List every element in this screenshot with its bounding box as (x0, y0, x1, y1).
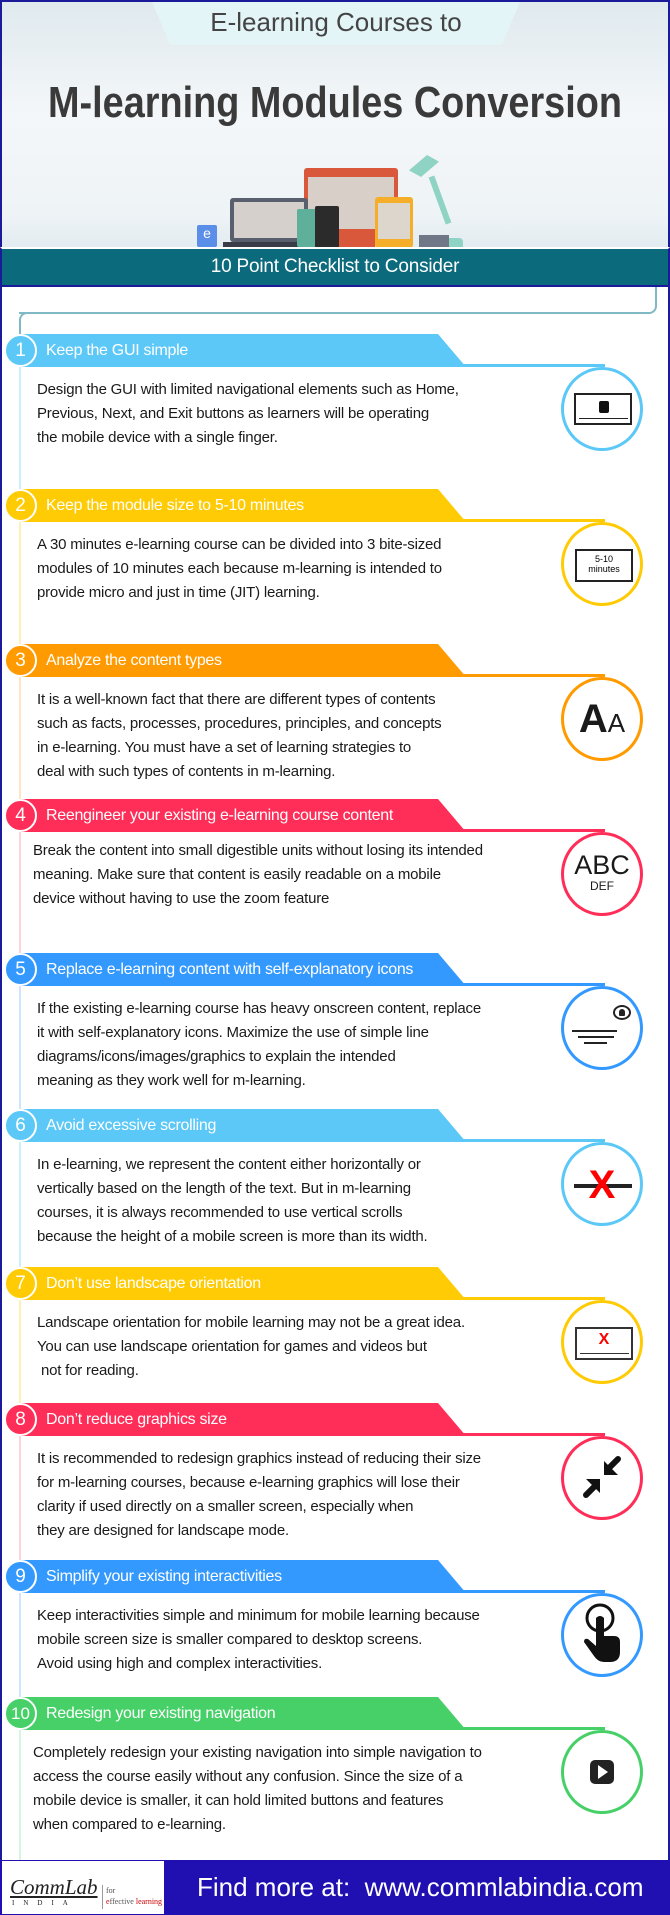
subtitle bar: 10 Point Checklist to Consider (211, 256, 459, 277)
text 9: Keep interactivities simple and minimum for mobile learning because (37, 1607, 480, 1624)
text 10 (33, 1744, 482, 1833)
heading 8: Don’t reduce graphics size (46, 1411, 227, 1428)
item 3: 3 (15, 650, 26, 671)
text 5: meaning as they work well for m-learning. (37, 1072, 306, 1089)
heading 7: Don’t use landscape orientation (46, 1275, 261, 1292)
item 1: 1 (15, 340, 26, 361)
item 10: 10 (11, 1704, 30, 1723)
text 1: Previous, Next, and Exit buttons as learners will be operating (37, 405, 429, 422)
text 1: the mobile device with a single finger. (37, 429, 278, 446)
hero illustration: devices (197, 155, 463, 247)
icon 9: touch hand (561, 1593, 643, 1677)
text 2: A 30 minutes e-learning course can be divided into 3 bite-sized (37, 536, 441, 553)
text 8: they are designed for landscape mode. (37, 1522, 289, 1539)
text 2 (37, 536, 442, 601)
item 3 (6, 644, 643, 799)
text 8: It is recommended to redesign graphics instead of reducing their size (37, 1450, 481, 1467)
item 6: 6 (15, 1115, 26, 1136)
text 8 (37, 1450, 481, 1539)
text 9 (37, 1607, 480, 1672)
heading 9: Simplify your existing interactivities (46, 1568, 282, 1585)
logo: effective learning (106, 1897, 162, 1906)
text 1: Design the GUI with limited navigational elements such as Home, (37, 381, 459, 398)
icon 4: ABC DEF (561, 832, 643, 916)
icon 3: AA (561, 677, 643, 761)
text 8: clarity if used directly on a smaller screen, especially when (37, 1498, 413, 1515)
heading 5: Replace e-learning content with self-explanatory icons (46, 961, 413, 978)
text 3: such as facts, processes, procedures, principles, and concepts (37, 715, 441, 732)
icon 6: line with red X (561, 1142, 643, 1226)
item 1 (6, 334, 643, 489)
icon 4: ABC DEF: ABC (574, 850, 630, 880)
text 2: provide micro and just in time (JIT) learning. (37, 584, 320, 601)
text 9: Avoid using high and complex interactivities. (37, 1655, 322, 1672)
item 7 (6, 1267, 643, 1403)
item 4 (6, 799, 643, 953)
item 5: 5 (15, 959, 26, 980)
icon 2 (561, 522, 643, 606)
mug (197, 225, 217, 247)
text 2: modules of 10 minutes each because m-learning is intended to (37, 560, 442, 577)
item 2 (6, 489, 643, 644)
text 6: courses, it is always recommended to use vertical scrolls (37, 1204, 402, 1221)
item 9: 9 (15, 1566, 26, 1587)
monitor (304, 168, 398, 236)
text 7: You can use landscape orientation for games and videos but (37, 1338, 427, 1355)
text 5 (37, 1000, 481, 1089)
heading 3: Analyze the content types (46, 652, 222, 669)
footer (0, 1860, 670, 1915)
top ribbon subtitle: E-learning Courses to (210, 7, 462, 37)
connector line (19, 287, 657, 314)
text 3 (37, 691, 442, 780)
text 6: vertically based on the length of the text. But in m-learning (37, 1180, 411, 1197)
text 7: Landscape orientation for mobile learning may not be a great idea. (37, 1314, 465, 1331)
text 3: deal with such types of contents in m-learning. (37, 763, 335, 780)
text 6 (37, 1156, 428, 1245)
icon 4: ABC DEF: DEF (590, 879, 614, 893)
text 7: not for reading. (41, 1362, 139, 1379)
item 5 (6, 953, 643, 1109)
icon 2: 5-10 (595, 554, 613, 564)
item 10 (6, 1697, 643, 1860)
text 4: Break the content into small digestible units without losing its intended (33, 842, 483, 859)
icon 5: lines and speech bubble (561, 986, 643, 1070)
text 4: device without having to use the zoom feature (33, 890, 329, 907)
phone (297, 209, 316, 247)
laptop (230, 198, 308, 242)
text 5: If the existing e-learning course has heavy onscreen content, replace (37, 1000, 481, 1017)
item 8 (6, 1403, 643, 1560)
item 4: 4 (15, 805, 26, 826)
text 10: when compared to e-learning. (33, 1816, 226, 1833)
tablet (375, 197, 413, 248)
logo (2, 1861, 164, 1914)
icon 3: AA: AA (579, 697, 625, 741)
item 8: 8 (15, 1409, 26, 1430)
icon 6: line with red X: X (589, 1163, 615, 1207)
text 10: Completely redesign your existing navigation into simple navigation to (33, 1744, 482, 1761)
text 6: because the height of a mobile screen is more than its width. (37, 1228, 428, 1245)
subtitle bar (0, 247, 670, 287)
item 7: 7 (15, 1273, 26, 1294)
icon 7: X (599, 1331, 609, 1348)
icon 1: screen play (561, 367, 643, 451)
footer link text: Find more at: www.commlabindia.com (197, 1872, 643, 1902)
text 4: meaning. Make sure that content is easily readable on a mobile (33, 866, 441, 883)
text 8: for m-learning courses, because e-learning graphics will lose their (37, 1474, 460, 1491)
lamp (429, 175, 451, 225)
text 10: access the course easily without any confusion. Since the size of a (33, 1768, 462, 1785)
header hero (0, 0, 670, 247)
heading 2: Keep the module size to 5-10 minutes (46, 497, 304, 514)
text 4 (33, 842, 483, 907)
item 2: 2 (15, 495, 26, 516)
text 9: mobile screen size is smaller compared to desktop screens. (37, 1631, 422, 1648)
text 6: In e-learning, we represent the content either horizontally or (37, 1156, 421, 1173)
text 3: It is a well-known fact that there are different types of contents (37, 691, 435, 708)
text 5: it with self-explanatory icons. Maximize the use of simple line (37, 1024, 429, 1041)
logo: CommLab (10, 1875, 98, 1899)
logo: INDIA (12, 1899, 77, 1907)
heading 1: Keep the GUI simple (46, 342, 188, 359)
text 7 (37, 1314, 465, 1379)
heading 4: Reengineer your existing e-learning course content (46, 807, 393, 824)
text 1 (37, 381, 459, 446)
logo: for (106, 1886, 115, 1895)
heading 10: Redesign your existing navigation (46, 1705, 275, 1722)
icon 10: play button (561, 1730, 643, 1814)
mug: e (203, 225, 211, 241)
icon 7 (561, 1300, 643, 1384)
icon 2: minutes (588, 564, 620, 574)
heading 6: Avoid excessive scrolling (46, 1117, 216, 1134)
item 9 (6, 1560, 643, 1697)
item 6 (6, 1109, 643, 1267)
main title: M-learning Modules Conversion (48, 78, 622, 127)
top ribbon subtitle (152, 2, 520, 36)
icon 8: compress arrows (561, 1436, 643, 1520)
text 5: diagrams/icons/images/graphics to explain the intended (37, 1048, 396, 1065)
text 3: in e-learning. You must have a set of learning strategies to (37, 739, 411, 756)
text 10: mobile device is smaller, it can hold limited buttons and features (33, 1792, 443, 1809)
